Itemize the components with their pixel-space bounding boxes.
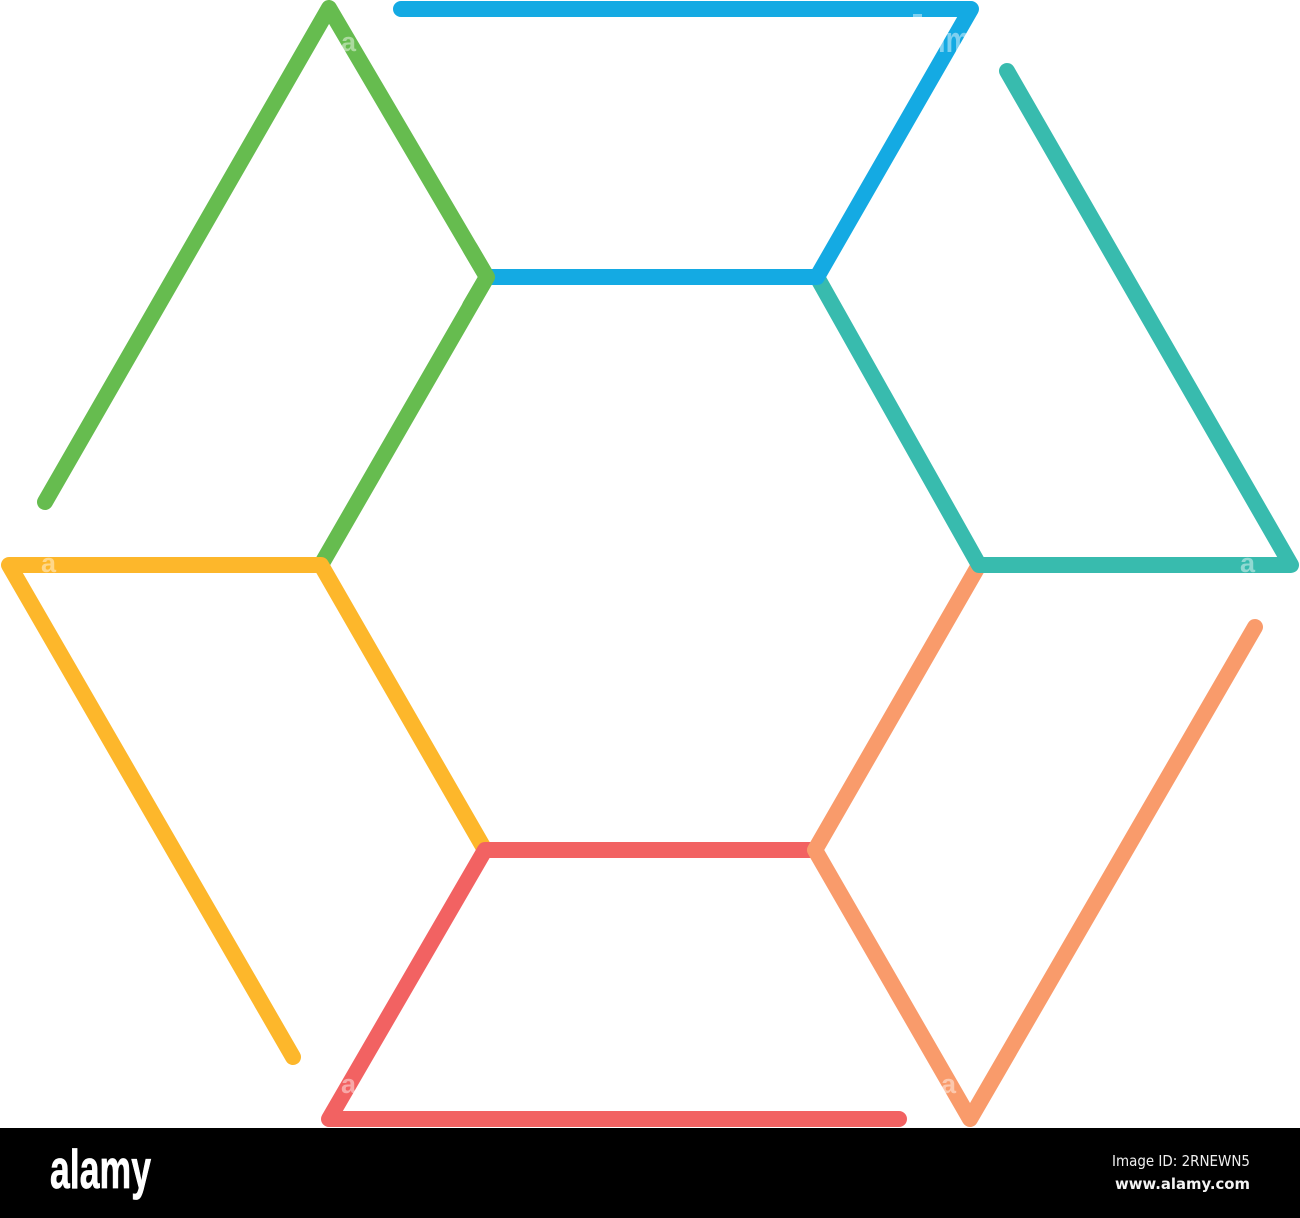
segment: orange lower right bbox=[815, 565, 1255, 1119]
watermark fragments: lm bbox=[938, 19, 970, 60]
image id text: Image ID: 2RNEWN5 bbox=[1112, 1152, 1250, 1170]
footer bar bbox=[0, 1128, 1300, 1218]
segment: blue top bbox=[401, 9, 971, 277]
watermark fragments: a bbox=[941, 1069, 957, 1099]
segment: yellow left bbox=[9, 565, 485, 1057]
segment: red bottom bbox=[329, 850, 899, 1119]
footer logo text: alamy bbox=[50, 1138, 151, 1200]
watermark fragments: a bbox=[341, 1069, 357, 1099]
segment: teal right bbox=[817, 71, 1291, 565]
watermark fragments: a bbox=[341, 27, 357, 57]
website text: www.alamy.com bbox=[1115, 1175, 1250, 1193]
segment: green upper left bbox=[45, 8, 487, 565]
watermark fragments: a bbox=[1240, 548, 1256, 578]
watermark fragments: a bbox=[41, 548, 57, 578]
green joint overlapping blue bbox=[470, 248, 487, 306]
